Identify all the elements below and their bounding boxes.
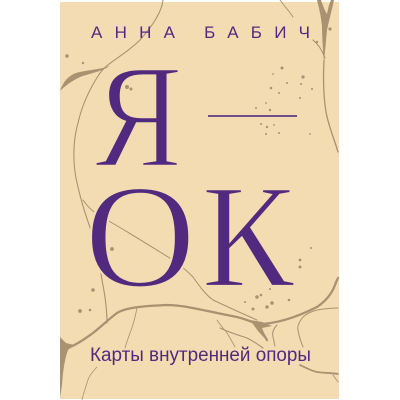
paint speckles [65, 27, 332, 313]
subtitle: Карты внутренней опоры [90, 345, 311, 366]
title: О: О [85, 154, 196, 318]
marble veins [70, 0, 338, 400]
author name: АННА БАБИЧ [91, 23, 310, 42]
title: Я: Я [95, 35, 182, 199]
cover background [60, 2, 339, 399]
title dash [208, 115, 297, 117]
title: К: К [202, 154, 295, 318]
vein shapes [60, 0, 334, 398]
